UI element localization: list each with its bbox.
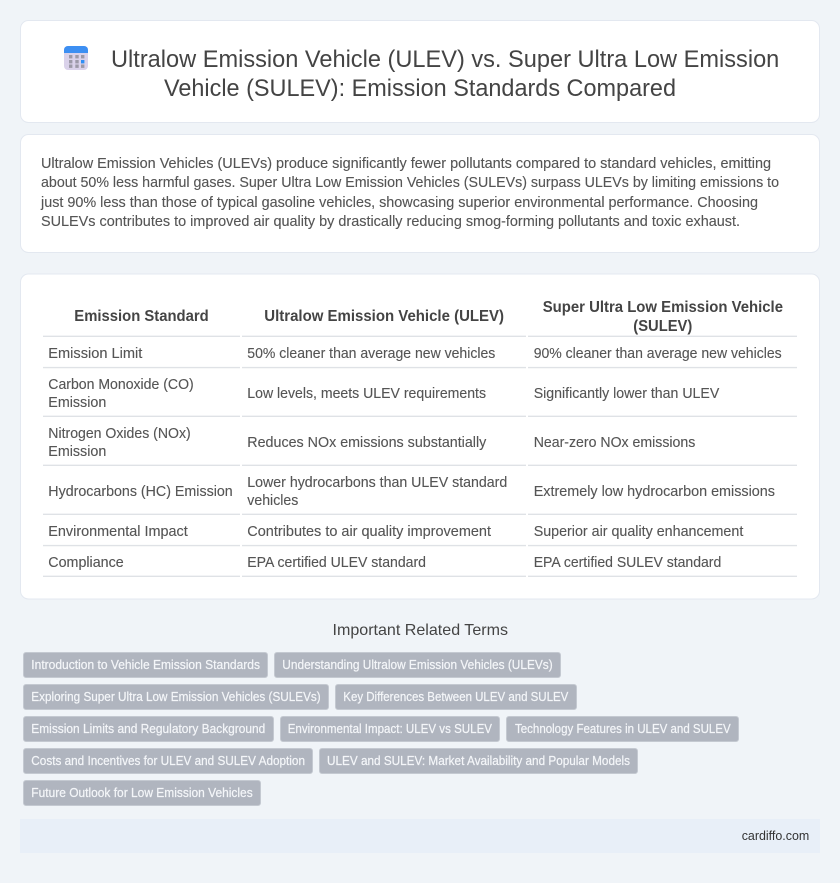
table header row: Ultralow Emission Vehicle (ULEV) [264,308,504,325]
row: carbon monoxide [48,377,720,411]
footer source text: cardiffo.com [742,828,809,843]
row: compliance: Compliance [48,555,124,571]
tag [280,716,500,742]
row: nitrogen oxides: Near-zero NOx emissions [534,435,695,451]
table header row: Super Ultra Low Emission Vehicle [543,299,783,316]
row: hydrocarbons: vehicles [247,493,298,509]
title: Vehicle (SULEV): Emission Standards Compared [164,75,676,102]
icon: calendar [64,46,88,70]
panel: comparison table [20,274,820,599]
row: carbon monoxide: Significantly lower than ULEV [534,386,720,402]
table header row [74,299,783,335]
row: emission limit: Emission Limit [48,346,142,362]
row: environmental impact [48,524,743,540]
panel: introduction [20,134,820,252]
tag: Key Differences Between ULEV and SULEV [343,689,569,704]
table header row: (SULEV) [633,318,692,335]
heading: important related terms: Important Related Terms [332,622,508,639]
tag: Emission Limits and Regulatory Background [31,721,265,736]
row: carbon monoxide: Carbon Monoxide (CO) [48,377,194,393]
tag: Technology Features in ULEV and SULEV [515,721,731,736]
row: compliance: EPA certified ULEV standard [247,555,426,571]
tag [336,684,576,710]
tag: Costs and Incentives for ULEV and SULEV Adoption [31,753,305,768]
tag [24,780,260,806]
footer bar [20,819,820,853]
tag: Introduction to Vehicle Emission Standards [31,657,260,672]
tag [24,684,328,710]
row: compliance: EPA certified SULEV standard [534,555,721,571]
row: emission limit: 50% cleaner than average new vehicles [247,346,495,362]
tag [320,748,638,774]
row: environmental impact: Superior air quality enhancement [534,524,743,540]
intro text block: about 50% less harmful gases. Super Ultra Low Emission Vehicles (SULEVs) surpass ULEVs by limiting emissions to [41,175,779,191]
row: environmental impact: Environmental Impact [48,524,188,540]
tag: Environmental Impact: ULEV vs SULEV [288,721,492,736]
tag: Understanding Ultralow Emission Vehicles (ULEVs) [282,657,553,672]
tag: ULEV and SULEV: Market Availability and Popular Models [327,753,630,768]
row: hydrocarbons: Hydrocarbons (HC) Emission [48,484,233,500]
row: nitrogen oxides [48,426,695,460]
tag [274,652,560,678]
row: hydrocarbons [48,475,775,509]
tag [506,716,738,742]
row: compliance [48,555,721,571]
intro text block: just 90% less than those of typical gasoline vehicles, showcasing superior environmental performance. Choosing [40,195,758,211]
intro text block: SULEVs contributes to improved air quality by drastically reducing smog-forming pollutants and toxic exhaust. [41,214,740,230]
row: environmental impact: Contributes to air quality improvement [247,524,491,540]
related term tags [24,652,738,806]
tag: Exploring Super Ultra Low Emission Vehicles (SULEVs) [31,689,321,704]
row: hydrocarbons: Extremely low hydrocarbon emissions [534,484,775,500]
row: carbon monoxide: Emission [48,395,106,411]
row: emission limit [48,346,782,362]
tag [24,748,312,774]
intro text block: Ultralow Emission Vehicles (ULEVs) produce significantly fewer pollutants compared to standard vehicles, emitting [41,156,771,172]
row: nitrogen oxides: Nitrogen Oxides (NOx) [48,426,191,442]
row: hydrocarbons: Lower hydrocarbons than ULEV standard [247,475,507,491]
row: nitrogen oxides: Reduces NOx emissions substantially [247,435,487,451]
title: Ultralow Emission Vehicle (ULEV) vs. Super Ultra Low Emission [111,46,779,73]
row: emission limit: 90% cleaner than average new vehicles [534,346,782,362]
table header row: Emission Standard [74,308,209,325]
row: nitrogen oxides: Emission [48,444,106,460]
tag [24,716,274,742]
panel: title header [20,20,820,122]
tag [24,652,268,678]
tag: Future Outlook for Low Emission Vehicles [31,785,253,800]
row: carbon monoxide: Low levels, meets ULEV requirements [247,386,486,402]
